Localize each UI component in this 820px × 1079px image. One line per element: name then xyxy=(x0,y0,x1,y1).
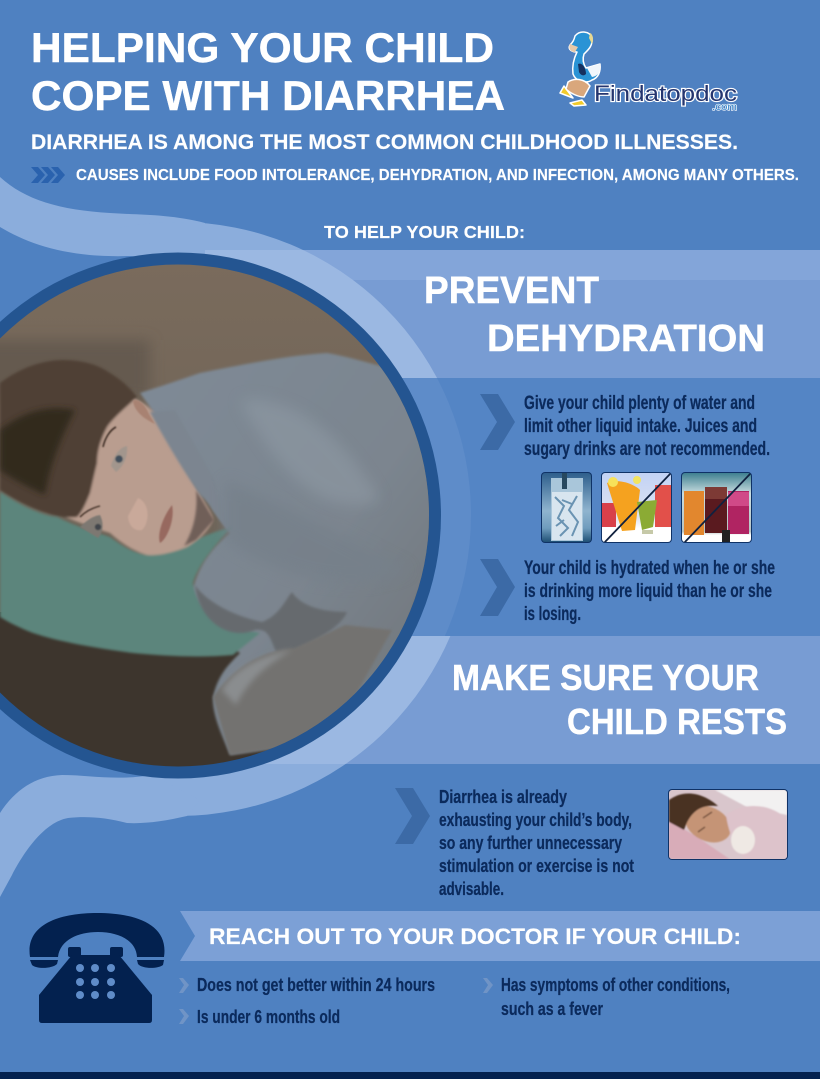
title: COPE WITH DIARRHEA xyxy=(31,72,505,119)
text: rest explanation: advisable. xyxy=(439,879,504,899)
image: glass of water xyxy=(541,472,592,543)
icon: triple chevron xyxy=(31,167,65,183)
text: hydrated xyxy=(524,558,775,625)
image: juices crossed out xyxy=(601,472,672,543)
image: sugary drinks crossed out xyxy=(681,472,752,543)
heading: make sure your child rests: CHILD RESTS xyxy=(567,701,787,742)
list item: other symptoms: Has symptoms of other conditions, xyxy=(501,975,730,995)
causes text: CAUSES INCLUDE FOOD INTOLERANCE, DEHYDRATION, AND INFECTION, AMONG MANY OTHERS. xyxy=(76,167,799,184)
list item: under 6 months xyxy=(179,1007,340,1027)
panel: prevent dehydration band xyxy=(178,250,820,378)
text: hydrated: is losing. xyxy=(524,604,581,625)
heading: make sure your child rests: MAKE SURE YOUR xyxy=(452,657,759,698)
panel: make sure your child rests band xyxy=(178,636,820,764)
text: rest explanation: so any further unnecessary xyxy=(439,833,622,853)
banner: reach out to your doctor: REACH OUT TO YOUR DOCTOR IF YOUR CHILD: xyxy=(209,924,741,949)
icon: chevron 2 xyxy=(480,559,515,616)
footer bar xyxy=(0,1072,820,1079)
banner: reach out to your doctor xyxy=(180,911,820,961)
logo .com: .com xyxy=(712,102,737,113)
text: rest explanation: stimulation or exercise is not xyxy=(439,856,634,876)
heading: prevent dehydration xyxy=(424,270,765,360)
list item: other symptoms xyxy=(483,975,730,1019)
icon: chevron 1 xyxy=(480,394,515,450)
title: HELPING YOUR CHILD xyxy=(31,24,494,71)
panel: body section background xyxy=(178,378,820,636)
title xyxy=(31,24,505,119)
text: rest explanation xyxy=(439,787,634,899)
heading: prevent dehydration: DEHYDRATION xyxy=(487,318,765,360)
text: rest explanation: exhausting your child’s body, xyxy=(439,810,632,830)
logo wordmark: Findatopdoc xyxy=(594,81,737,106)
icon: chevron 3 xyxy=(395,788,430,844)
heading: make sure your child rests xyxy=(452,657,787,742)
swoosh: top left xyxy=(0,177,205,262)
list item: 24 hours: Does not get better within 24 hours xyxy=(197,975,435,995)
heading: prevent dehydration: PREVENT xyxy=(424,270,599,312)
subtitle: DIARRHEA IS AMONG THE MOST COMMON CHILDHOOD ILLNESSES. xyxy=(31,130,738,154)
icon: telephone xyxy=(30,913,164,1023)
logo: Findatopdoc xyxy=(560,32,737,113)
list item: other symptoms: such as a fever xyxy=(501,999,603,1019)
image: sleeping child xyxy=(668,789,788,860)
swoosh: ring around photo xyxy=(157,223,471,816)
to help heading: TO HELP YOUR CHILD: xyxy=(324,222,525,242)
text: rest explanation: Diarrhea is already xyxy=(439,787,567,807)
icon: duck mascot xyxy=(560,32,600,106)
swoosh: bottom left xyxy=(0,775,200,897)
photo: sick boy under blanket xyxy=(0,252,441,782)
text: give your child water xyxy=(524,393,770,460)
list item: under 6 months: Is under 6 months old xyxy=(197,1007,340,1027)
